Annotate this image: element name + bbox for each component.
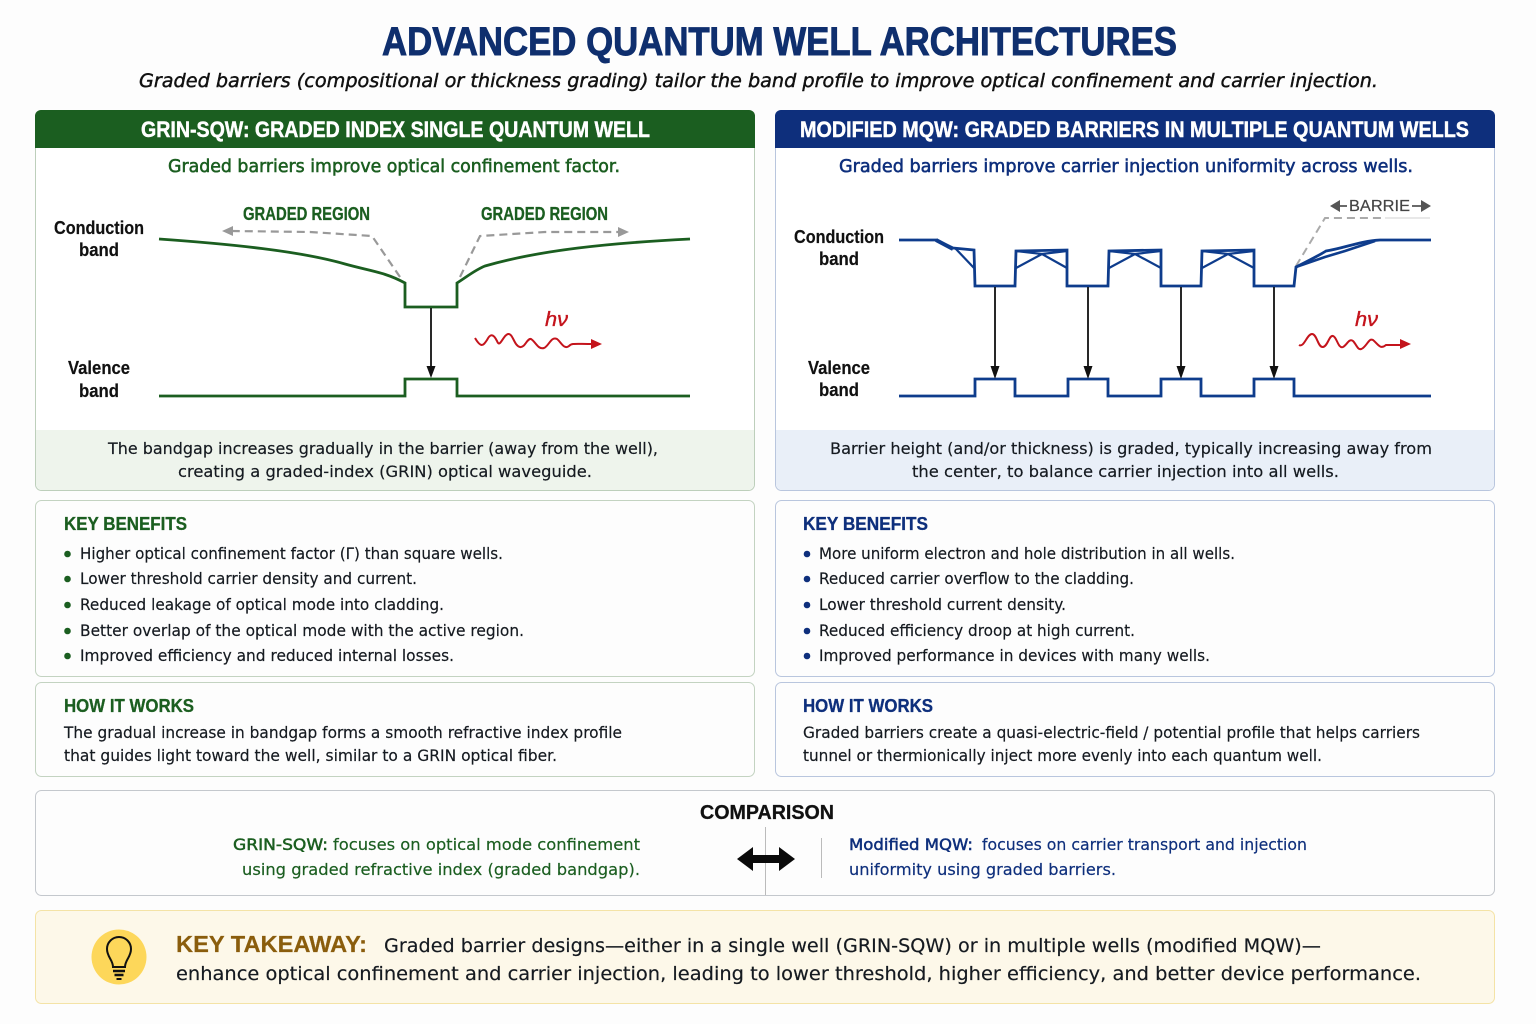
subtitle: Graded barriers (compositional or thickness grading) tailor the band profile to improve optical confinement and carrier injection. xyxy=(139,70,1378,92)
header: Modified MQW xyxy=(775,110,1495,148)
panel: key benefits GRIN-SQW xyxy=(36,500,754,676)
benefits list: Improved efficiency and reduced internal losses. xyxy=(80,646,454,665)
caption: GRIN-SQW xyxy=(107,439,658,481)
label: conduction band xyxy=(54,218,144,260)
label: valence band xyxy=(68,358,130,401)
panel: how it works Modified MQW xyxy=(776,682,1494,776)
comparison text: GRIN-SQW: focuses on optical mode confinement xyxy=(333,835,640,854)
explanation text: that guides light toward the well, similar to a GRIN optical fiber. xyxy=(64,746,557,765)
comparison text: GRIN-SQW: using graded refractive index (graded bandgap). xyxy=(242,860,640,879)
benefits list xyxy=(80,544,524,665)
conduction band profile xyxy=(899,240,1431,286)
subheading: GRIN-SQW: Graded barriers improve optical confinement factor. xyxy=(168,157,620,177)
benefits list: Lower threshold current density. xyxy=(819,595,1066,614)
heading: key benefits: KEY BENEFITS xyxy=(803,514,928,534)
panel: key takeaway xyxy=(36,910,1494,1004)
label: graded region right: GRADED REGION xyxy=(481,204,608,224)
dashed arrow: graded region right xyxy=(460,227,629,277)
comparison text: GRIN-SQW: GRIN-SQW: xyxy=(233,835,328,854)
caption: GRIN-SQW: creating a graded-index (GRIN) optical waveguide. xyxy=(178,462,592,481)
header: Modified MQW: MODIFIED MQW: GRADED BARRIERS IN MULTIPLE QUANTUM WELLS xyxy=(800,117,1469,142)
key takeaway label: KEY TAKEAWAY: xyxy=(176,931,367,957)
comparison text: Modified MQW xyxy=(849,835,1307,879)
explanation text: tunnel or thermionically inject more evenly into each quantum well. xyxy=(803,746,1322,765)
bullet markers xyxy=(64,551,71,659)
benefits list: Lower threshold carrier density and current. xyxy=(80,569,417,588)
label: valence band: Valence xyxy=(68,358,130,378)
caption background: GRIN-SQW xyxy=(36,430,754,490)
header: GRIN-SQW xyxy=(35,110,755,148)
label: valence band xyxy=(808,358,870,400)
comparison text: Modified MQW: Modified MQW: xyxy=(849,835,973,854)
label: conduction band: Conduction xyxy=(794,227,884,247)
key takeaway text: enhance optical confinement and carrier injection, leading to lower threshold, higher efficiency, and better device performance. xyxy=(176,963,1421,985)
subheading: Modified MQW: Graded barriers improve carrier injection uniformity across wells. xyxy=(839,157,1413,177)
wavy arrow: photon xyxy=(1299,334,1411,349)
valence band profile xyxy=(159,379,690,396)
explanation text: The gradual increase in bandgap forms a smooth refractive index profile xyxy=(63,723,622,742)
divider lines xyxy=(766,827,822,895)
panel: GRIN-SQW diagram xyxy=(35,110,755,490)
label: graded region left: GRADED REGION xyxy=(243,204,370,224)
label: photon energy: hν xyxy=(545,309,568,331)
wavy arrow: photon xyxy=(475,334,602,349)
heading: comparison: COMPARISON xyxy=(700,802,834,824)
benefits list: Reduced efficiency droop at high current. xyxy=(819,621,1135,640)
benefits list: Better overlap of the optical mode with the active region. xyxy=(80,621,524,640)
key takeaway text xyxy=(176,935,1421,985)
comparison text: GRIN-SQW xyxy=(233,835,640,879)
header: GRIN-SQW: GRIN-SQW: GRADED INDEX SINGLE QUANTUM WELL xyxy=(141,117,650,142)
benefits list: Reduced carrier overflow to the cladding. xyxy=(819,569,1134,588)
benefits list: Higher optical confinement factor (Γ) than square wells. xyxy=(80,544,503,563)
label: conduction band: band xyxy=(79,240,119,260)
arrow: transition xyxy=(426,308,436,378)
panel: Modified MQW diagram xyxy=(775,110,1495,490)
benefits list: More uniform electron and hole distribution in all wells. xyxy=(819,544,1235,563)
label: conduction band xyxy=(794,227,884,269)
dashed arrow: graded region left xyxy=(222,226,400,277)
caption: GRIN-SQW: The bandgap increases gradually in the barrier (away from the well), xyxy=(107,439,658,458)
heading: key benefits: KEY BENEFITS xyxy=(64,514,187,534)
benefits list: Reduced leakage of optical mode into cladding. xyxy=(80,595,444,614)
caption: Modified MQW: the center, to balance carrier injection into all wells. xyxy=(912,462,1339,481)
label: conduction band: Conduction xyxy=(54,218,144,238)
label: barrier: BARRIE xyxy=(1349,198,1410,215)
panel: key benefits Modified MQW xyxy=(776,500,1494,676)
title: ADVANCED QUANTUM WELL ARCHITECTURES xyxy=(382,20,1177,64)
key takeaway text: Graded barrier designs—either in a single well (GRIN-SQW) or in multiple wells (modified MQW)— xyxy=(384,935,1321,957)
caption: Modified MQW xyxy=(830,439,1432,481)
benefits list: Improved performance in devices with many wells. xyxy=(819,646,1210,665)
comparison text: Modified MQW: uniformity using graded barriers. xyxy=(849,860,1116,879)
label: valence band: band xyxy=(819,380,859,400)
dashed leader: barrier xyxy=(1296,218,1430,266)
explanation text xyxy=(63,723,622,765)
explanation text xyxy=(803,723,1420,765)
heading: how it works: HOW IT WORKS xyxy=(803,696,933,716)
bullet markers xyxy=(804,551,810,659)
label: barrier xyxy=(1330,198,1431,215)
caption background: Modified MQW xyxy=(776,430,1494,490)
label: valence band: Valence xyxy=(808,358,870,378)
benefits list xyxy=(819,544,1235,665)
label: conduction band: band xyxy=(819,249,859,269)
caption: Modified MQW: Barrier height (and/or thickness) is graded, typically increasing away from xyxy=(830,439,1432,458)
icon: double arrow xyxy=(737,847,795,871)
label: valence band: band xyxy=(79,381,119,401)
explanation text: Graded barriers create a quasi-electric-field / potential profile that helps carriers xyxy=(803,723,1420,742)
panel: how it works GRIN-SQW xyxy=(36,682,754,776)
valence band profile xyxy=(899,379,1431,396)
label: photon energy: hν xyxy=(1355,309,1378,331)
arrows: transitions xyxy=(990,287,1278,379)
panel: comparison xyxy=(36,790,1494,896)
comparison text: Modified MQW: focuses on carrier transport and injection xyxy=(982,835,1307,854)
heading: how it works: HOW IT WORKS xyxy=(64,696,194,716)
icon: light bulb xyxy=(92,930,146,984)
conduction band profile xyxy=(159,239,690,307)
